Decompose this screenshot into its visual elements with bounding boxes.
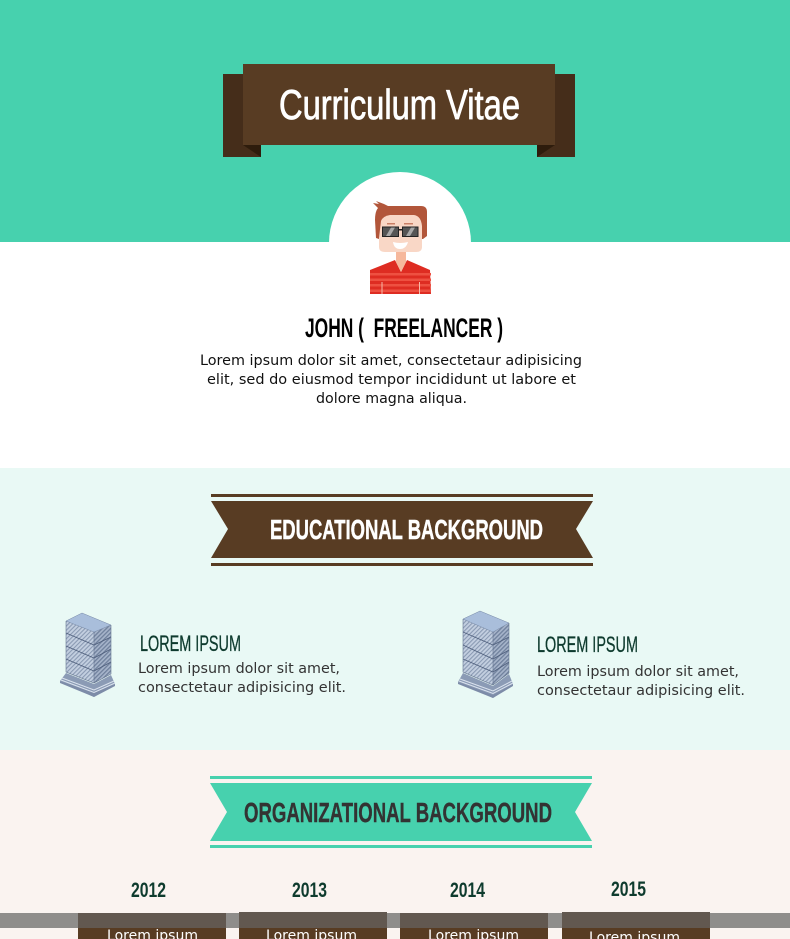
text block: education item right: consectetaur adipisicing elit.: [537, 683, 745, 699]
panel: header band: [0, 0, 790, 242]
text block: education item left: consectetaur adipisicing elit.: [138, 680, 346, 696]
timeline entry 2014: 2014: [450, 879, 485, 902]
text block: profile summary: elit, sed do eiusmod tempor incididunt ut labore et: [207, 372, 576, 388]
timeline entry 2013: 2013: [292, 879, 327, 902]
text block: education item right: LOREM IPSUM: [537, 632, 638, 657]
icon: building right: [458, 611, 513, 698]
heading: organizational background: ORGANIZATIONAL BACKGROUND: [244, 797, 552, 828]
text block: profile summary: dolore magna aliqua.: [316, 391, 467, 407]
timeline entry 2014: [400, 879, 548, 939]
icon: avatar man with sunglasses: [370, 201, 431, 294]
heading: educational background: EDUCATIONAL BACKGROUND: [270, 514, 543, 545]
timeline entry 2012: 2012: [131, 879, 166, 902]
banner: educational background: [211, 494, 593, 566]
panel: profile section: [0, 242, 790, 468]
timeline entry 2013: [239, 879, 387, 939]
title ribbon: [223, 64, 575, 157]
text block: education item left: LOREM IPSUM: [140, 631, 241, 656]
text block: education item left: [138, 631, 346, 696]
text block: education item right: [537, 632, 745, 699]
panel: organizational background section: [0, 750, 790, 939]
text block: profile summary: Lorem ipsum dolor sit amet, consectetaur adipisicing: [200, 353, 582, 369]
title text: Curriculum Vitae: [279, 81, 520, 128]
timeline entry 2015: 2015: [611, 878, 646, 901]
timeline entry 2015: [562, 878, 710, 939]
heading: name: JOHN ( FREELANCER ): [305, 313, 503, 343]
text block: education item right: Lorem ipsum dolor sit amet,: [537, 664, 739, 680]
banner: organizational background: [210, 776, 592, 848]
timeline entry 2012: [78, 879, 226, 939]
text block: profile summary: [200, 353, 582, 407]
timeline: [0, 878, 790, 939]
icon: building left: [60, 613, 115, 697]
avatar circle: [329, 172, 471, 314]
panel: educational background section: [0, 468, 790, 750]
text block: education item left: Lorem ipsum dolor sit amet,: [138, 661, 340, 677]
